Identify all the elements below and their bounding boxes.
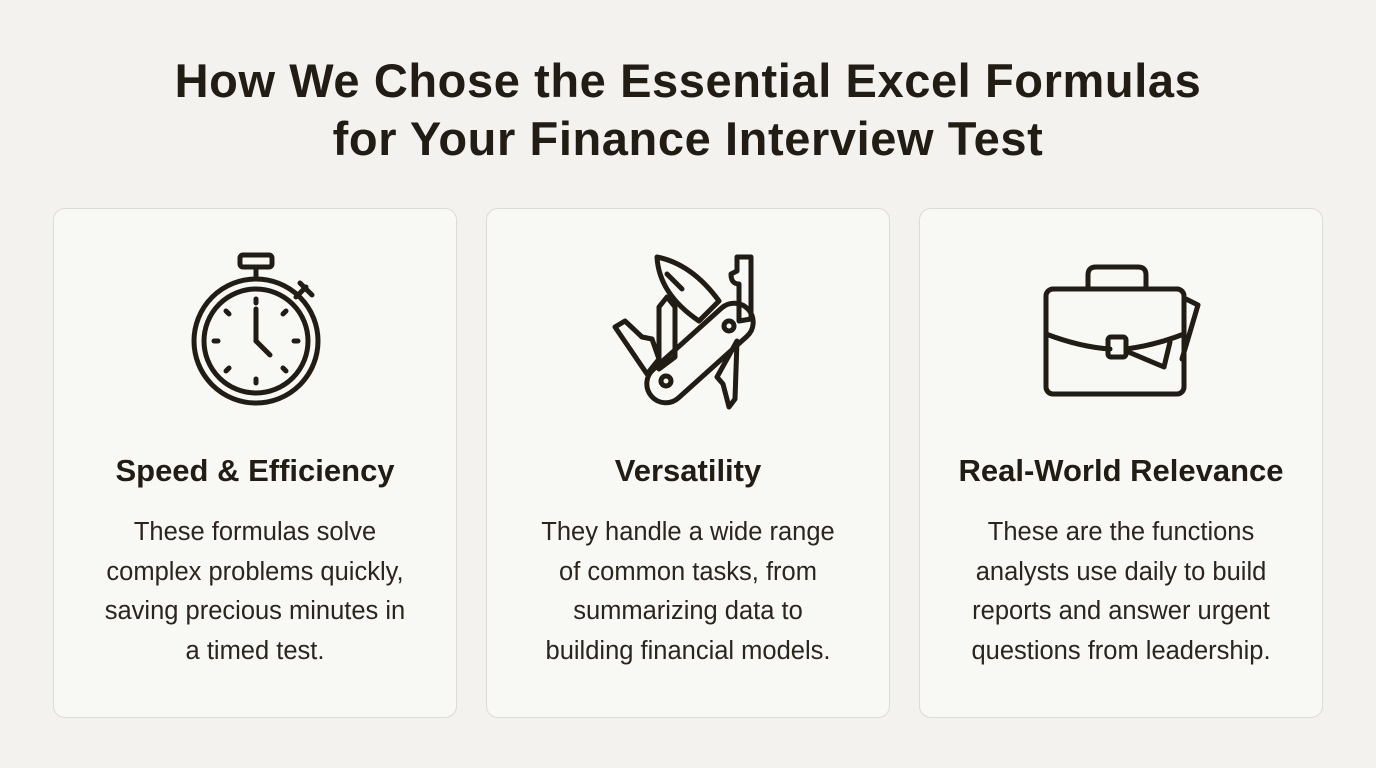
text: building financial models. bbox=[546, 636, 830, 664]
text: They handle a wide range bbox=[541, 518, 835, 546]
panel: versatility bbox=[486, 208, 890, 718]
text: of common tasks, from bbox=[559, 558, 817, 586]
title bbox=[175, 54, 1201, 165]
text bbox=[541, 518, 835, 664]
icon: swiss knife bbox=[612, 254, 756, 410]
text: complex problems quickly, bbox=[106, 558, 404, 586]
text bbox=[105, 518, 405, 664]
heading: Speed & Efficiency bbox=[115, 453, 395, 488]
text: These are the functions bbox=[988, 518, 1254, 546]
heading: Versatility bbox=[615, 453, 761, 488]
title: How We Chose the Essential Excel Formulas bbox=[175, 54, 1201, 107]
panel: speed bbox=[53, 208, 457, 718]
icon: briefcase bbox=[1044, 264, 1200, 396]
text: summarizing data to bbox=[573, 597, 803, 625]
text: analysts use daily to build bbox=[976, 558, 1266, 586]
text bbox=[971, 518, 1271, 664]
text: questions from leadership. bbox=[971, 636, 1271, 664]
panel: relevance bbox=[919, 208, 1323, 718]
text: saving precious minutes in bbox=[105, 597, 405, 625]
text: reports and answer urgent bbox=[972, 597, 1270, 625]
heading: Real-World Relevance bbox=[958, 453, 1284, 488]
icon: stopwatch bbox=[192, 252, 320, 406]
text: These formulas solve bbox=[134, 518, 376, 546]
title: for Your Finance Interview Test bbox=[333, 112, 1043, 165]
text: a timed test. bbox=[186, 636, 324, 664]
